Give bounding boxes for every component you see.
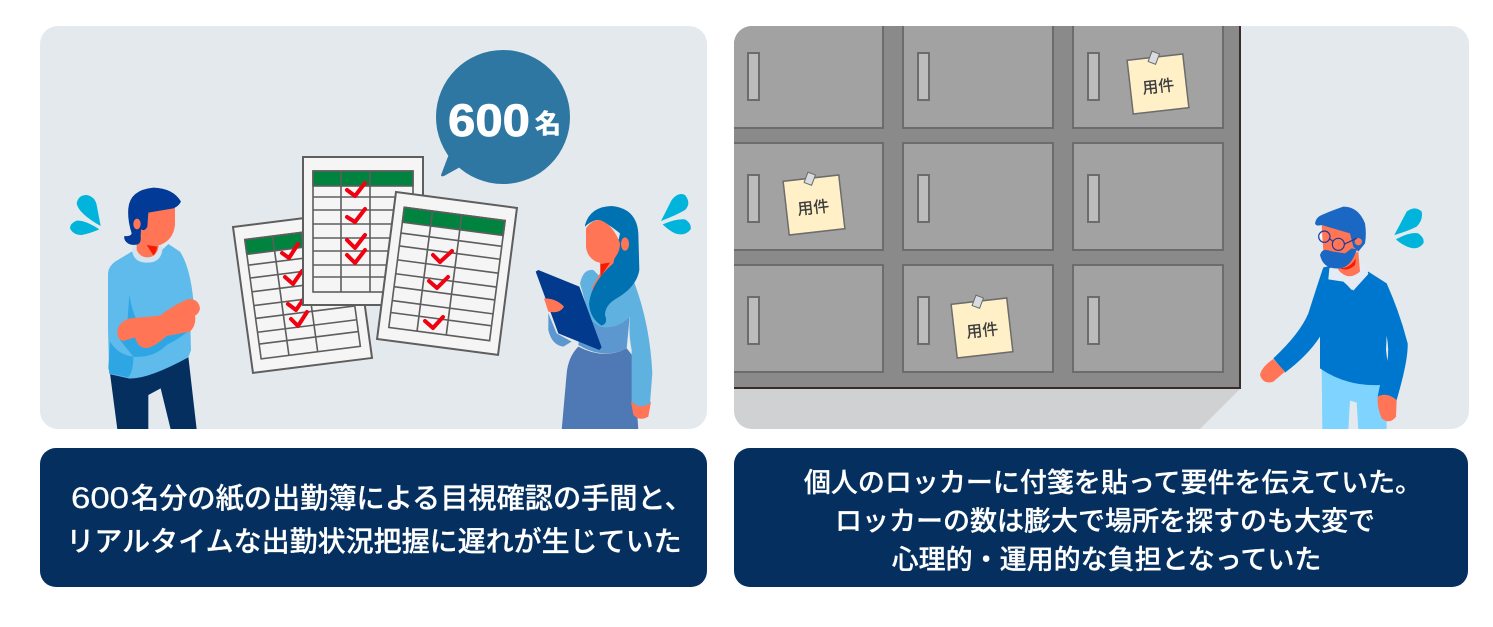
locker cabinet [720,10,1240,388]
icon: sweat drops, left man [70,195,101,235]
figure: bearded man with glasses [1260,207,1408,430]
caption box: right: 個人のロッカーに付箋を貼って要件を伝えていた。 [804,468,1422,498]
attendance sheet: left [233,212,372,373]
caption box: right [734,448,1468,587]
panel: lockers illustration [720,10,1469,430]
caption box: left: 名分の紙の出勤簿による目視確認の手間と、 [131,482,693,514]
floor shadow [734,388,1241,429]
attendance sheet: centre [303,157,423,305]
sticky note: bottom middle locker [950,292,1013,358]
sticky note: top right locker [1126,48,1189,114]
sticky note: bottom middle locker: 用件 [965,320,999,342]
attendance sheet: right [377,192,517,355]
caption box: left [40,448,707,587]
speech bubble: 600名 [436,50,570,184]
sticky note: middle left locker [782,169,845,235]
caption box: right: ロッカーの数は膨大で場所を探すのも大変で [835,506,1375,536]
sticky note: top right locker: 用件 [1141,76,1175,98]
caption box: left: 600 [71,482,129,515]
icon: sweat drops, woman [661,194,691,234]
figure: woman with clipboard [536,206,652,430]
caption box: left: リアルタイムな出勤状況把握に遅れが生じていた [66,526,682,557]
figure: man with crossed arms [108,188,200,429]
speech bubble: 600名: 名 [535,109,561,139]
sticky note: middle left locker: 用件 [796,197,830,219]
caption box: right: 心理的・運用的な負担となっていた [892,545,1321,575]
icon: sweat drops, bearded man [1394,208,1424,248]
panel: paper attendance illustration [40,26,707,430]
speech bubble: 600名: 600 [448,95,530,146]
